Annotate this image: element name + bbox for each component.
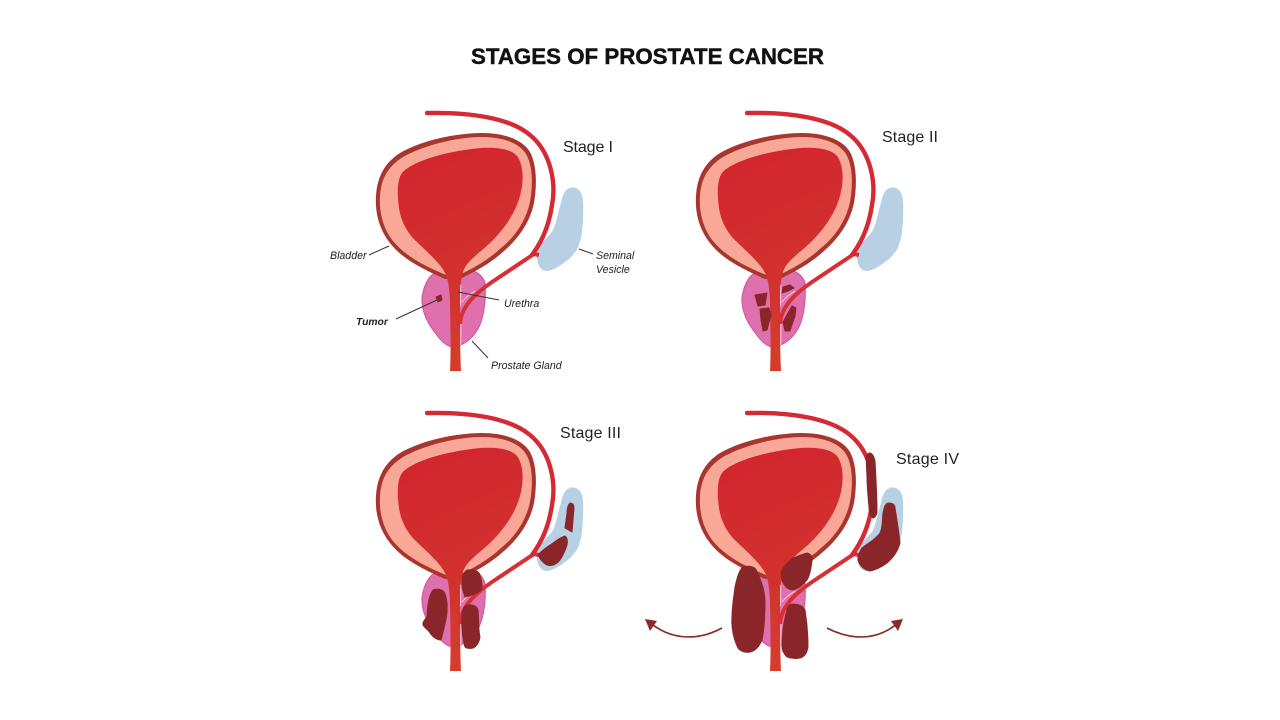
label: Bladder [330,246,389,262]
label: Stage IV: Stage IV [896,451,959,468]
label: Tumor: Tumor [356,317,389,328]
tumor dot [436,295,442,302]
vas deferens branch [460,254,539,324]
anatomy diagram [696,413,902,671]
label: Urethra: Urethra [504,298,539,310]
seminal vesicle [537,188,582,270]
label: Stage I: Stage I [563,139,613,156]
panel: stage I [330,113,635,372]
anatomy diagram [376,413,582,671]
bladder lumen and urethra [398,148,523,371]
label: Tumor [356,300,437,328]
label: Seminal Vesicle: Seminal [596,250,635,262]
label: Stage III: Stage III [560,425,621,442]
arrow: left spread [645,619,722,637]
anatomy diagram [696,113,902,371]
bladder inner lining [380,137,532,275]
label: Prostate Gland: Prostate Gland [491,360,563,372]
seminal duct tube [427,113,553,255]
arrow: right spread [827,619,903,637]
tumors [732,453,900,658]
panel: stage IV [645,413,959,671]
label: Prostate Gland [472,341,563,372]
label: Seminal Vesicle [579,249,635,276]
panel: stage III [376,413,621,671]
label: Bladder: Bladder [330,250,367,262]
label: Urethra [458,292,539,310]
panel: stage II [696,113,938,371]
anatomy diagram [376,113,582,371]
tumors [423,503,574,648]
bladder wall [376,133,536,279]
label: Stage II: Stage II [882,129,938,146]
pale edges beside urethra [461,285,475,345]
title: STAGES OF PROSTATE CANCER [471,44,824,69]
label: Seminal Vesicle: Vesicle [596,264,630,276]
prostate gland [422,270,485,347]
tumors [755,285,796,331]
